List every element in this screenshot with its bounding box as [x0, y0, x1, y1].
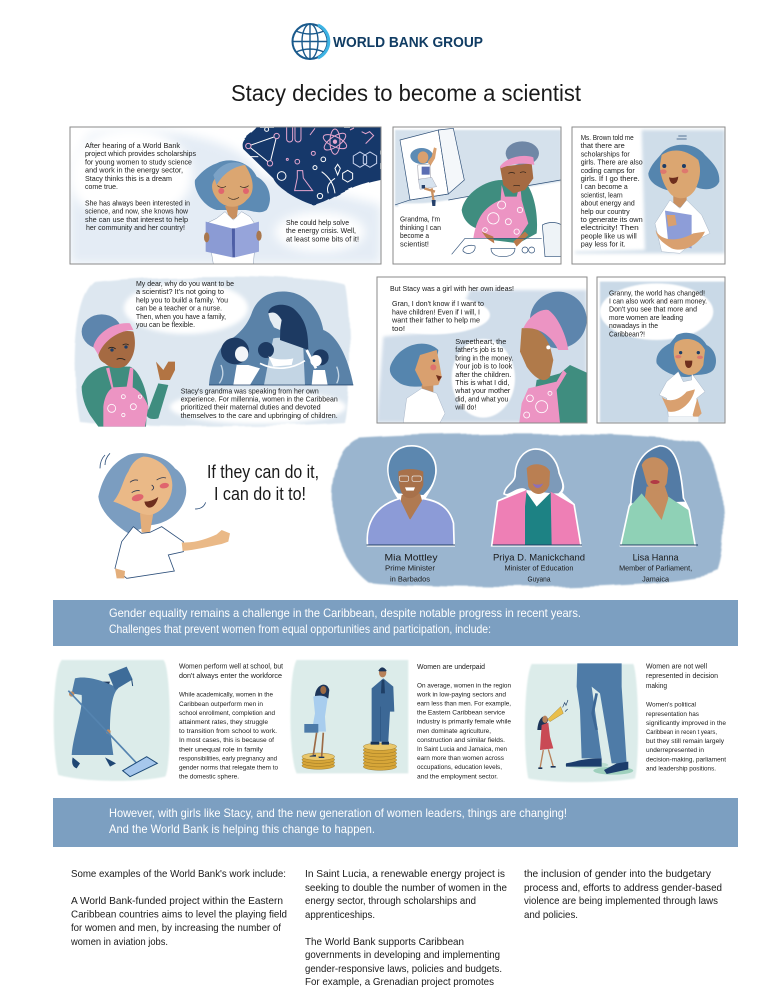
- speech: scholarships: scholarships for: [581, 149, 630, 158]
- coins: short stack: [302, 753, 335, 769]
- text: women are not well represented: Caribbean in recen t years,: [646, 729, 717, 736]
- speech: grandma: My dear, why do you want to be: [136, 279, 234, 288]
- speech: If they can do it: [207, 462, 319, 504]
- text: energy crisis: the energy crisis. Well,: [286, 226, 356, 235]
- speech: If they can do it: I can do it to!: [214, 484, 306, 504]
- figure: giant legs: [566, 663, 628, 774]
- text column: budgetary process: process and, efforts to address gender-based: [524, 883, 722, 894]
- speech: Granny, the world has changed: more women are leading: [609, 313, 683, 322]
- caption: [493, 553, 585, 584]
- text: women perform well at school: school enrollment, completion and: [179, 710, 275, 717]
- text column: budgetary process: and policies.: [524, 910, 578, 921]
- banner: things are changing: [53, 798, 738, 847]
- text: women are underpaid: industry is primarily female while: [417, 719, 511, 726]
- text: women are not well represented: significantly improved in the: [646, 720, 726, 727]
- speech: scholarships: scientist, learn: [581, 190, 623, 199]
- caption: Jamaica: [642, 577, 669, 584]
- speech: grandma: This is what I did,: [455, 378, 509, 387]
- text: women perform well at school: In most cases, this is because of: [179, 737, 274, 744]
- text: women are not well represented: [646, 664, 726, 772]
- speech: grandma: what your mother: [454, 386, 511, 395]
- text: intro: She has always been interested in: [85, 198, 190, 207]
- text: women are underpaid: On average, women in the region: [417, 682, 511, 689]
- speech: grandma: a scientist? It's not going to: [136, 287, 224, 296]
- speech: Stacy to grandma: become a: [400, 231, 430, 240]
- speech: scholarships: people like us will: [581, 231, 637, 240]
- speech: scholarships: Ms. Brown told me: [581, 133, 634, 142]
- text: energy crisis: She could help solve: [286, 218, 349, 227]
- text: energy crisis: [286, 218, 359, 243]
- panel: Stacy and grandma disagree: [377, 277, 588, 423]
- speech: Stacy to grandma: thinking I can: [400, 223, 441, 232]
- caption: in Barbados: [390, 577, 431, 584]
- speech: grandma: Then, when you have a family,: [136, 312, 226, 321]
- wash: [75, 276, 350, 427]
- text: women perform well at school: the domestic sphere.: [179, 774, 239, 781]
- text: energy crisis: at least some bits of it!: [286, 234, 359, 243]
- leader: Priya D. Manickchand: [493, 450, 585, 584]
- character: grandma: [82, 314, 175, 427]
- banner: gender equality challenge: Gender equality remains a challenge in the Caribbean, despite notable progress in recent years.: [109, 607, 581, 620]
- banner: gender equality challenge: [53, 600, 738, 646]
- speech: Stacy: Gran, I don't know if I want to: [392, 299, 484, 308]
- caption: Member of Parliament,: [619, 566, 692, 573]
- text column: World Bank work examples: Some examples of the World Bank's work include:: [71, 869, 286, 880]
- speech: grandma: father's job is to: [455, 345, 503, 354]
- character: grandma cooking: [462, 141, 539, 247]
- text: women perform well at school: While academically, women in the: [179, 692, 273, 699]
- character: large Stacy gesturing: [98, 453, 230, 578]
- coins: tall stack: [363, 743, 397, 770]
- text column: Saint Lucia and governments: For example, a Grenadian project promotes: [305, 977, 494, 988]
- speech: Stacy to grandma: Grandma, I'm: [400, 215, 440, 224]
- speech: scholarships: girls. If I go there.: [581, 174, 640, 183]
- caption: grandma's experience: [181, 386, 338, 420]
- speech: scholarships: to generate its own: [581, 215, 643, 224]
- text column: World Bank work examples: Caribbean countries aims to level the playing field: [71, 910, 287, 920]
- wash: [377, 290, 587, 423]
- caption: grandma's experience: themselves to the care and upbringing of children.: [181, 411, 338, 420]
- text column: World Bank work examples: women in aviation jobs.: [70, 937, 168, 948]
- caption: Mia Mottley: [384, 553, 438, 564]
- text: women are underpaid: the Eastern Caribbean service: [417, 710, 505, 717]
- text: intro: for young women to study science: [85, 157, 192, 166]
- speech: grandma: after the children.: [455, 370, 511, 379]
- caption: Lisa Hanna: [633, 553, 679, 564]
- banner: things are changing: However, with girls like Stacy, and the new generation of women leaders, things are changing!: [109, 807, 567, 820]
- speech: scholarships: about energy and: [581, 199, 635, 208]
- banner: things are changing: And the World Bank is helping this change to happen.: [109, 823, 375, 836]
- speech: Stacy: want their father to help me: [391, 316, 480, 325]
- text: women are underpaid: construction and similar fields.: [417, 737, 505, 744]
- speech: Stacy: [391, 299, 484, 333]
- text column: World Bank work examples: [70, 869, 287, 948]
- speech: Granny, the world has changed: Granny, the world has changed!: [609, 288, 705, 297]
- speech: grandma: Sweetheart, the: [455, 337, 506, 346]
- text column: Saint Lucia and governments: energy sector, through scholarships and: [305, 896, 476, 907]
- text column: World Bank work examples: for women and men, by increasing the number of: [71, 923, 281, 934]
- speech: grandma: [136, 279, 234, 329]
- speech: If they can do it: If they can do it,: [207, 462, 319, 482]
- text: women are underpaid: occupations, education levels,: [417, 764, 502, 771]
- text: own ideas: But Stacy was a girl with her own ideas!: [390, 284, 514, 293]
- text: women are not well represented: representation has: [646, 711, 700, 718]
- wash: [575, 130, 725, 253]
- panel: grandma's advice: [75, 276, 353, 427]
- figure: woman: [304, 685, 329, 758]
- banner: gender equality challenge: Challenges that prevent women from equal opportunities and participation, include:: [109, 623, 491, 636]
- text: women are underpaid: earn more than women across: [417, 755, 505, 762]
- wash: [600, 282, 725, 423]
- science icons: [246, 127, 377, 199]
- leader: Mia Mottley: [368, 447, 453, 584]
- text: intro: project which provides scholarships: [85, 149, 196, 158]
- figure: man: [371, 667, 394, 745]
- text: women are not well represented: decision-making, parliament: [646, 756, 726, 763]
- text: women are not well represented: represented in decision: [646, 673, 718, 680]
- speech: Stacy: too!: [392, 324, 405, 333]
- text: intro: [85, 141, 196, 232]
- speech: Stacy to grandma: [400, 215, 441, 248]
- text: women are not well represented: and leadership positions.: [646, 765, 716, 772]
- character: Stacy with notebook: [648, 136, 719, 253]
- leader: Lisa Hanna: [619, 447, 694, 584]
- speech: scholarships: pay less for it.: [581, 240, 626, 249]
- panel: Stacy dreams of science: [68, 127, 381, 264]
- speech: grandma: did, and what you: [455, 394, 508, 403]
- speech: Granny, the world has changed: I can also work and earn money.: [609, 296, 707, 306]
- speech: Stacy to grandma: scientist!: [400, 239, 429, 248]
- icon: kitchen table, bowl, pot: [452, 222, 562, 257]
- caption: grandma's experience: experience. For millennia, women in the Caribbean: [181, 394, 338, 404]
- text: women are underpaid: earn less than men. For example,: [417, 700, 511, 708]
- speech: Granny, the world has changed: Don't you see that more and: [609, 305, 697, 314]
- speech: scholarships: coding camps for: [581, 166, 635, 175]
- icon: globe: [292, 24, 329, 59]
- watercolor blob: [332, 434, 724, 587]
- speech: scholarships: electricity! Then: [581, 223, 639, 232]
- caption: Priya D. Manickchand: [493, 553, 585, 564]
- text: women are not well represented: making: [646, 683, 667, 690]
- speech: grandma: help you to build a family. You: [136, 295, 228, 304]
- text: women are not well represented: Women's political: [646, 702, 697, 709]
- speech: grandma: bring in the money.: [455, 353, 513, 362]
- speech: scholarships: girls. There are also: [581, 158, 643, 167]
- text column: Saint Lucia and governments: [305, 869, 507, 988]
- speech: grandma: [454, 337, 513, 412]
- text: intro: she can use that interest to help: [85, 215, 188, 224]
- speech: grandma: can be a teacher or a nurse.: [136, 304, 222, 313]
- caption: [384, 553, 438, 584]
- text: women perform well at school: Women perform well at school, but: [179, 663, 283, 670]
- caption: grandma's experience: prioritized their maternal duties and devoted: [181, 403, 321, 412]
- text: women are not well represented: underrepresented in: [646, 747, 704, 754]
- character: Stacy in profile: [390, 344, 445, 423]
- text: women perform well at school: attainment rates, they struggle: [179, 719, 268, 726]
- text: women are underpaid: and the employment sector.: [417, 773, 498, 780]
- text column: Saint Lucia and governments: apprenticeships.: [305, 910, 375, 921]
- panel: women leaders: [332, 434, 724, 587]
- text column: Saint Lucia and governments: seeking to double the number of women in the: [305, 883, 507, 894]
- caption: Minister of Education: [504, 566, 574, 573]
- figure: woman with megaphone: [537, 700, 568, 769]
- logo: World Bank Group: [292, 24, 483, 59]
- text: women are underpaid: In Saint Lucia and Jamaica, men: [417, 746, 507, 753]
- text: women are underpaid: Women are underpaid: [417, 664, 485, 671]
- text: women perform well at school: their unequal role in family: [179, 746, 264, 753]
- character: Stacy with book: [195, 160, 270, 264]
- speech: Stacy: have children! Even if I will, I: [392, 308, 480, 316]
- text: women perform well at school: to transition from school to work.: [179, 728, 277, 735]
- text: women are not well represented: Women are not well: [646, 664, 707, 671]
- speech: scholarships: [581, 133, 643, 249]
- text: women perform well at school: responsibilities, early pregnancy and: [179, 755, 277, 762]
- speech: Granny, the world has changed: [609, 288, 707, 338]
- panel: Stacy tells grandma: [393, 127, 562, 264]
- text column: Saint Lucia and governments: In Saint Lucia, a renewable energy project is: [305, 869, 505, 880]
- text: intro: science, and now, she knows how: [85, 207, 189, 216]
- scene: mother with children: [209, 291, 353, 385]
- title: Stacy decides to become a scientist: [231, 80, 582, 106]
- speech: grandma: will do!: [454, 403, 476, 412]
- navy science cloud: [242, 127, 381, 205]
- wash: [395, 130, 561, 207]
- text: women are underpaid: [416, 664, 511, 780]
- speech: scholarships: I can become a: [581, 182, 629, 191]
- speech: scholarships: help our country: [581, 207, 630, 216]
- illustration: graduate mopping: [54, 660, 170, 781]
- text column: World Bank work examples: A World Bank-funded project within the Eastern: [71, 896, 283, 907]
- text column: Saint Lucia and governments: The World Bank supports Caribbean: [305, 937, 464, 948]
- text column: budgetary process: [524, 869, 722, 921]
- text: intro: After hearing of a World Bank: [85, 141, 180, 150]
- logo: World Bank Group: WORLD BANK GROUP: [333, 35, 483, 51]
- character: Stacy speaking: [656, 333, 716, 423]
- illustration: pay gap on coins: [290, 660, 408, 773]
- text: women perform well at school: Caribbean outperform men in: [179, 701, 263, 708]
- speech: Granny, the world has changed: nowadays in the: [609, 321, 658, 330]
- character: little Stacy running: [410, 147, 437, 206]
- speech: grandma: Your job is to look: [455, 362, 513, 371]
- caption: [619, 553, 692, 584]
- text: women perform well at school: don't always enter the workforce: [179, 673, 282, 680]
- text: intro: Stacy thinks this is a dream: [85, 174, 172, 183]
- text column: budgetary process: violence are being implemented through laws: [524, 896, 718, 907]
- wash: [70, 131, 381, 264]
- speech: Granny, the world has changed: Caribbean?!: [609, 329, 645, 338]
- text: women are not well represented: but they still remain largely: [646, 738, 725, 745]
- text column: Saint Lucia and governments: governments in developing and implementing: [305, 950, 500, 961]
- text: intro: and work in the energy sector,: [85, 166, 183, 175]
- text: women are underpaid: men dominate agriculture,: [417, 728, 491, 735]
- text: women are underpaid: work in low-paying sectors and: [416, 691, 506, 698]
- caption: grandma's experience: Stacy's grandma was speaking from her own: [181, 386, 319, 395]
- caption: Guyana: [528, 577, 551, 584]
- speech: scholarships: that there are: [581, 141, 625, 150]
- text column: budgetary process: the inclusion of gender into the budgetary: [524, 869, 712, 880]
- panel: Stacy explains scholarships: [572, 127, 725, 264]
- panel: the world has changed: [597, 277, 725, 423]
- text column: Saint Lucia and governments: gender-responsive laws, policies and budgets.: [305, 964, 502, 975]
- speech: grandma: you can be flexible.: [136, 320, 195, 329]
- caption: Prime Minister: [385, 566, 436, 573]
- text: intro: come true.: [85, 182, 118, 191]
- character: grandma in profile: [519, 292, 588, 423]
- illustration: giant legs and woman with megaphone: [525, 663, 638, 782]
- text: women perform well at school: [179, 663, 283, 781]
- text: women perform well at school: gender norms that relegate them to: [179, 764, 278, 772]
- text: intro: her community and her country!: [86, 223, 185, 232]
